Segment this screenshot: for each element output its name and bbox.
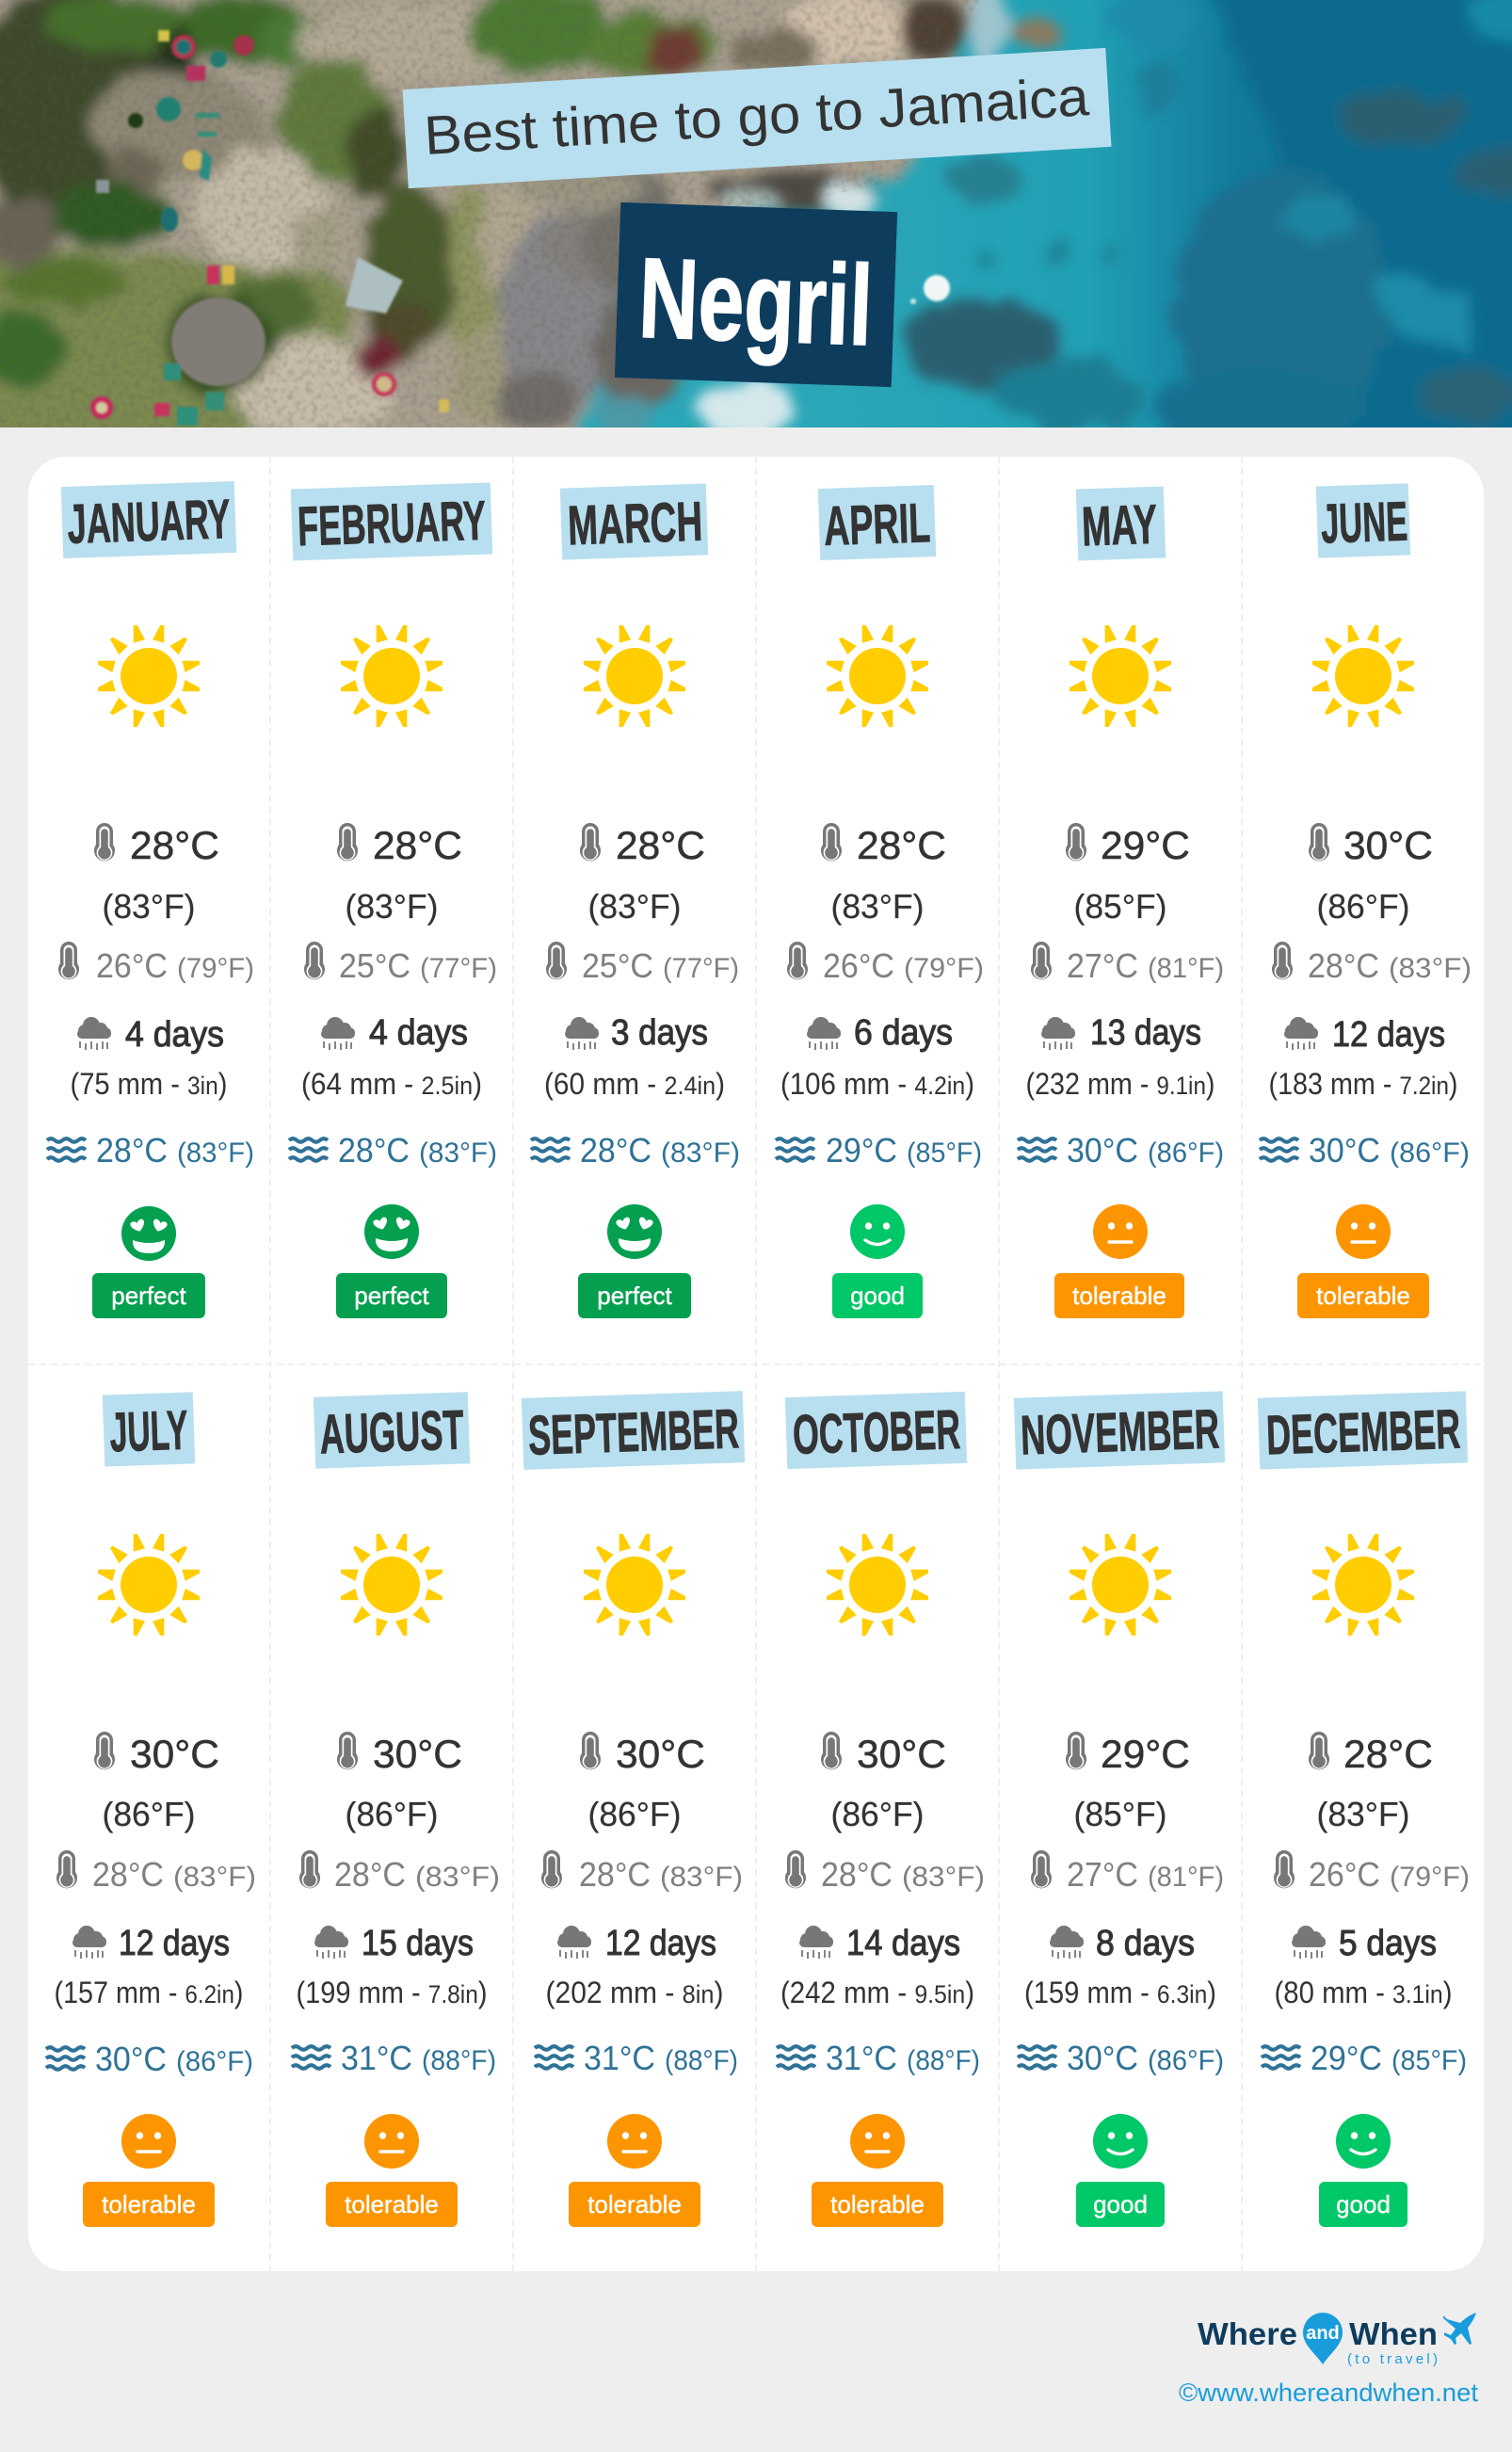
rainy days: (183 mm - 7.2in)	[1269, 1067, 1457, 1101]
rating: perfect: perfect	[597, 1282, 673, 1310]
logo: Where and When	[1198, 2313, 1476, 2367]
sea temperature	[776, 1131, 982, 1170]
high temperature: (86°F)	[830, 1795, 925, 1833]
title banner: Best time to go to Jamaica: Best time to go to Jamaica	[423, 66, 1091, 167]
month heading	[522, 1391, 745, 1470]
sea temperature	[1018, 2039, 1224, 2077]
month heading	[1076, 486, 1166, 561]
rainy days: 12 days	[1332, 1015, 1445, 1055]
rainy days: 12 days	[605, 1924, 716, 1963]
high temperature: 28°C	[857, 823, 946, 867]
rainy days	[1275, 1924, 1452, 2009]
low temperature	[1031, 942, 1224, 985]
rating: perfect: perfect	[111, 1282, 187, 1310]
icon: sun	[341, 625, 442, 727]
photo grain	[0, 0, 979, 427]
high temperature: (83°F)	[345, 887, 439, 926]
logo: Where and When: (to travel)	[1347, 2351, 1438, 2367]
panel: October	[777, 1392, 985, 2227]
high temperature	[580, 1732, 705, 1833]
high temperature	[337, 823, 462, 926]
sea temperature: 31°C	[584, 2039, 655, 2077]
panel: August	[292, 1392, 500, 2227]
high temperature: (83°F)	[102, 887, 196, 926]
rating: perfect	[578, 1204, 691, 1318]
rainy days: (199 mm - 7.8in)	[296, 1976, 488, 2009]
high temperature: 29°C	[1101, 823, 1190, 867]
sea temperature: (83°F)	[661, 1137, 740, 1169]
low temperature: (81°F)	[1148, 1862, 1224, 1893]
sea temperature	[289, 1131, 497, 1170]
month heading	[785, 1392, 967, 1469]
low temperature	[541, 1850, 743, 1894]
low temperature: (83°F)	[173, 1862, 256, 1893]
low temperature: (81°F)	[1148, 953, 1224, 984]
low temperature: 27°C	[1067, 1855, 1138, 1894]
month heading	[103, 1392, 195, 1467]
high temperature: (83°F)	[1316, 1795, 1410, 1833]
high temperature	[1066, 1732, 1190, 1833]
low temperature: 28°C	[92, 1855, 164, 1894]
title banner: Negril: Negril	[636, 234, 875, 369]
panel: March	[531, 483, 740, 1318]
low temperature	[58, 942, 254, 985]
low temperature: 28°C	[579, 1855, 651, 1894]
rainy days: 8 days	[1096, 1924, 1195, 1963]
rating: tolerable	[812, 2114, 943, 2227]
high temperature: 28°C	[130, 823, 219, 867]
month heading: JANUARY	[67, 488, 232, 556]
website credit: ©www.whereandwhen.net	[1179, 2379, 1478, 2407]
sea temperature: 31°C	[826, 2039, 897, 2077]
rainy days: 14 days	[846, 1924, 960, 1963]
rating: good	[1319, 2114, 1407, 2227]
low temperature: 26°C	[1309, 1855, 1380, 1894]
rating: tolerable: tolerable	[1072, 1282, 1166, 1310]
low temperature: (83°F)	[1389, 953, 1472, 984]
month heading: AUGUST	[319, 1398, 465, 1466]
low temperature: (77°F)	[420, 953, 497, 984]
rainy days: 6 days	[854, 1013, 953, 1053]
rating: perfect: perfect	[354, 1282, 430, 1310]
sea temperature: (83°F)	[177, 1137, 254, 1169]
month heading: SEPTEMBER	[527, 1397, 740, 1467]
rainy days: (64 mm - 2.5in)	[301, 1067, 482, 1101]
sea temperature: (86°F)	[1148, 1137, 1224, 1169]
sea temperature: (88°F)	[665, 2045, 738, 2076]
sea temperature: 30°C	[1309, 1131, 1380, 1170]
month heading: FEBRUARY	[297, 490, 487, 557]
rating: tolerable: tolerable	[345, 2190, 439, 2218]
rainy days: (157 mm - 6.2in)	[55, 1976, 243, 2009]
low temperature	[1274, 1850, 1470, 1894]
rainy days: 4 days	[369, 1013, 468, 1053]
low temperature: 28°C	[1308, 946, 1379, 985]
panel: September	[522, 1391, 745, 2227]
month heading: JULY	[108, 1399, 189, 1463]
rainy days	[544, 1013, 725, 1101]
high temperature: (85°F)	[1073, 887, 1167, 926]
rainy days	[55, 1924, 243, 2009]
rainy days	[780, 1013, 974, 1101]
high temperature: 30°C	[616, 1732, 705, 1776]
panel: July	[46, 1392, 256, 2227]
sea temperature	[535, 2039, 738, 2077]
rating: good	[1076, 2114, 1165, 2227]
rainy days: 4 days	[125, 1015, 224, 1055]
icon: airplane	[1443, 2313, 1476, 2345]
rating: tolerable: tolerable	[830, 2190, 925, 2218]
panel: February	[289, 483, 497, 1318]
month heading: OCTOBER	[792, 1398, 961, 1466]
rainy days: (232 mm - 9.1in)	[1026, 1067, 1214, 1101]
title banner: Negril	[615, 202, 897, 387]
rainy days: (159 mm - 6.3in)	[1024, 1976, 1216, 2009]
rating: good: good	[1093, 2190, 1148, 2218]
high temperature	[1309, 823, 1433, 926]
icon: sun	[1070, 625, 1171, 727]
rainy days: (80 mm - 3.1in)	[1275, 1976, 1452, 2009]
low temperature: (79°F)	[904, 953, 984, 984]
sea temperature: (85°F)	[1391, 2045, 1467, 2076]
rating: tolerable	[83, 2114, 215, 2227]
header photo: aerial coast	[0, 0, 1512, 471]
sea temperature: (86°F)	[1148, 2045, 1224, 2076]
sea temperature: 30°C	[1067, 2039, 1138, 2077]
high temperature: 28°C	[373, 823, 462, 867]
high temperature: (86°F)	[1316, 887, 1410, 926]
rating: tolerable	[326, 2114, 458, 2227]
low temperature: 28°C	[334, 1855, 406, 1894]
month heading: JUNE	[1320, 490, 1408, 555]
sea temperature: (88°F)	[907, 2045, 980, 2076]
icon: sun	[1312, 1534, 1414, 1636]
sea temperature: 28°C	[338, 1131, 410, 1170]
sea temperature: 30°C	[95, 2040, 167, 2078]
panel: January	[47, 481, 254, 1318]
rainy days: (60 mm - 2.4in)	[544, 1067, 725, 1101]
low temperature	[546, 942, 739, 985]
rainy days: 5 days	[1339, 1924, 1437, 1963]
low temperature: 26°C	[823, 946, 894, 985]
low temperature: 25°C	[339, 946, 410, 985]
rating: tolerable	[569, 2114, 700, 2227]
low temperature	[1031, 1850, 1224, 1894]
rating: good	[832, 1204, 923, 1318]
panel: April	[776, 485, 984, 1318]
high temperature: 28°C	[616, 823, 705, 867]
rainy days	[301, 1013, 482, 1101]
high temperature: (85°F)	[1073, 1795, 1167, 1833]
high temperature: 28°C	[1343, 1732, 1433, 1776]
high temperature: 30°C	[130, 1732, 219, 1776]
icon: sun	[98, 625, 200, 727]
sea temperature: (85°F)	[907, 1137, 982, 1169]
panel: December	[1258, 1391, 1470, 2227]
rainy days: 3 days	[611, 1013, 708, 1053]
icon: sun	[827, 1534, 928, 1636]
rainy days	[546, 1924, 723, 2009]
high temperature: 30°C	[373, 1732, 462, 1776]
sea temperature: 28°C	[96, 1131, 168, 1170]
sea temperature: (86°F)	[176, 2046, 253, 2077]
low temperature	[787, 942, 984, 985]
rating: good: good	[850, 1282, 905, 1310]
sea temperature	[777, 2039, 980, 2077]
rainy days: (242 mm - 9.5in)	[780, 1976, 974, 2009]
panel: monthly weather card	[28, 457, 1484, 2271]
rating: tolerable: tolerable	[1316, 1282, 1410, 1310]
rainy days	[70, 1015, 228, 1101]
low temperature: (77°F)	[663, 953, 739, 984]
sea temperature: (88°F)	[422, 2045, 496, 2076]
high temperature: (86°F)	[345, 1795, 439, 1833]
icon: sun	[827, 625, 928, 727]
month heading	[291, 483, 492, 560]
month heading: NOVEMBER	[1020, 1398, 1220, 1466]
low temperature: 28°C	[821, 1855, 893, 1894]
sea temperature: 31°C	[341, 2039, 412, 2077]
high temperature	[821, 1732, 946, 1833]
rainy days	[296, 1924, 488, 2009]
rating: good: good	[1336, 2190, 1391, 2218]
sea temperature	[531, 1131, 740, 1170]
panel: November	[1014, 1391, 1225, 2227]
high temperature	[94, 1732, 219, 1833]
panel: May	[1018, 486, 1224, 1318]
high temperature	[1066, 823, 1190, 926]
rainy days	[1026, 1013, 1214, 1101]
sea temperature: 30°C	[1067, 1131, 1138, 1170]
high temperature: (86°F)	[102, 1795, 196, 1833]
low temperature: 27°C	[1067, 946, 1138, 985]
low temperature: 26°C	[96, 946, 168, 985]
month heading: APRIL	[823, 492, 931, 557]
sea temperature	[1260, 1131, 1470, 1170]
title banner: Best time to go to Jamaica	[403, 48, 1111, 188]
rating: tolerable	[1297, 1204, 1429, 1318]
high temperature	[821, 823, 946, 926]
month heading: MARCH	[567, 491, 703, 557]
sea temperature	[46, 2040, 253, 2078]
logo: Where and When: Where	[1198, 2316, 1297, 2351]
sea temperature: 29°C	[826, 1131, 897, 1170]
sea temperature	[47, 1131, 254, 1170]
low temperature: 25°C	[582, 946, 653, 985]
low temperature: (79°F)	[177, 953, 254, 984]
rating: tolerable: tolerable	[587, 2190, 682, 2218]
high temperature	[94, 823, 219, 926]
sea temperature	[1018, 1131, 1224, 1170]
low temperature: (83°F)	[660, 1862, 743, 1893]
month heading: MAY	[1081, 493, 1158, 557]
sea temperature: 28°C	[580, 1131, 651, 1170]
rating: tolerable	[1054, 1204, 1184, 1318]
icon: sun	[1070, 1534, 1171, 1636]
icon: map pin	[1303, 2313, 1343, 2364]
month heading	[818, 485, 936, 560]
sea temperature	[292, 2039, 496, 2077]
rainy days: 13 days	[1090, 1013, 1201, 1053]
logo: Where and When: When	[1349, 2316, 1438, 2351]
rainy days: (202 mm - 8in)	[545, 1976, 724, 2009]
icon: sun	[98, 1534, 200, 1636]
month heading	[1316, 483, 1410, 558]
rainy days	[780, 1924, 974, 2009]
rainy days	[1269, 1015, 1457, 1101]
low temperature: (79°F)	[1390, 1862, 1470, 1893]
rainy days: (106 mm - 4.2in)	[780, 1067, 974, 1101]
sea temperature: (83°F)	[419, 1137, 497, 1169]
rating: perfect	[92, 1206, 205, 1318]
month heading	[1014, 1391, 1225, 1470]
high temperature: (86°F)	[587, 1795, 682, 1833]
logo: Where and When: and	[1306, 2323, 1340, 2344]
high temperature: (83°F)	[587, 887, 682, 926]
low temperature	[56, 1850, 256, 1894]
icon: sun	[341, 1534, 442, 1636]
rainy days: (75 mm - 3in)	[70, 1067, 228, 1101]
rainy days: 12 days	[119, 1924, 230, 1963]
rainy days	[1024, 1924, 1216, 2009]
high temperature: 29°C	[1101, 1732, 1190, 1776]
month heading	[314, 1392, 470, 1469]
rating: perfect	[336, 1204, 447, 1318]
high temperature: 30°C	[1343, 823, 1433, 867]
low temperature	[785, 1850, 985, 1894]
month heading	[560, 483, 708, 560]
sea temperature: 29°C	[1311, 2039, 1382, 2077]
high temperature	[580, 823, 705, 926]
rating: tolerable: tolerable	[102, 2190, 196, 2218]
high temperature	[1309, 1732, 1433, 1833]
sea temperature	[1262, 2039, 1467, 2077]
low temperature	[299, 1850, 500, 1894]
low temperature: (83°F)	[902, 1862, 985, 1893]
rainy days: 15 days	[362, 1924, 474, 1963]
icon: sun	[584, 1534, 685, 1636]
panel: June	[1260, 483, 1472, 1318]
high temperature	[337, 1732, 462, 1833]
icon: sun	[1312, 625, 1414, 727]
low temperature: (83°F)	[415, 1862, 500, 1893]
sea temperature: (86°F)	[1390, 1137, 1470, 1169]
high temperature: (83°F)	[830, 887, 925, 926]
month heading	[61, 481, 236, 558]
high temperature: 30°C	[857, 1732, 946, 1776]
icon: sun	[584, 625, 685, 727]
low temperature	[1272, 942, 1472, 985]
low temperature	[304, 942, 497, 985]
